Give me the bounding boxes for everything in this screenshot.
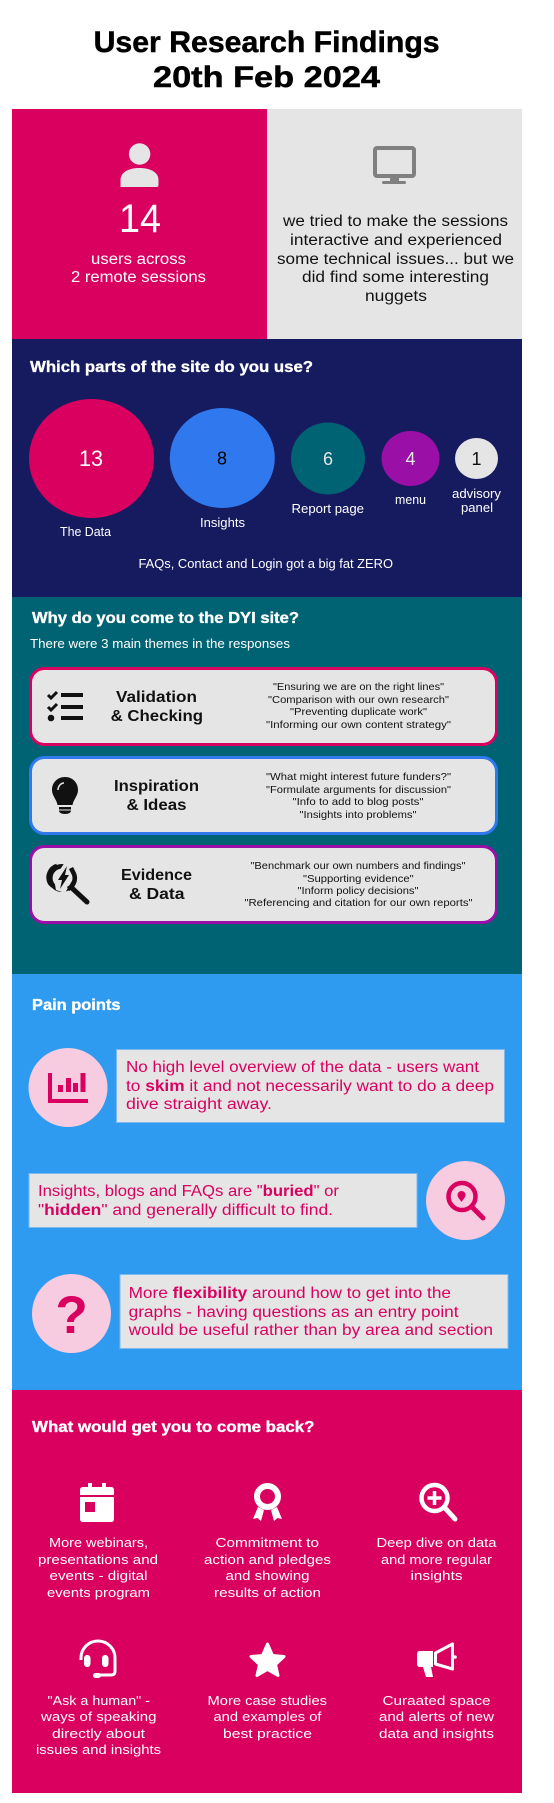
- item text: More case studies: [208, 1693, 328, 1708]
- attendance caption: [71, 251, 206, 286]
- heading: pain points: Pain points: [32, 997, 121, 1014]
- callout text: graphs - having questions as an entry point: [129, 1304, 459, 1321]
- title: [94, 26, 440, 94]
- card: inspiration and ideas: [30, 758, 496, 834]
- callout text: [116, 1050, 504, 1122]
- icon: star: [251, 1644, 284, 1676]
- card quotes: "What might interest future funders?": [266, 771, 451, 783]
- card quotes: "Formulate arguments for discussion": [266, 784, 451, 796]
- icon: headset: [81, 1641, 115, 1678]
- icon: checklist: [48, 692, 83, 721]
- heading: site usage: Which parts of the site do you use?: [30, 359, 313, 376]
- icon: light bulb: [52, 777, 78, 814]
- item: webinars: [38, 1483, 158, 1600]
- bubble: menu 4: 4: [406, 449, 416, 469]
- card quotes: "Preventing duplicate work": [290, 706, 427, 718]
- card title: [121, 867, 192, 903]
- item text: events program: [47, 1585, 150, 1600]
- icon: magnifier with bolt: [49, 862, 87, 902]
- bubble: Report page 6: [291, 422, 365, 516]
- icon: user: [120, 143, 158, 187]
- item text: and showing: [226, 1568, 310, 1583]
- card quotes: "Supporting evidence": [303, 873, 414, 885]
- icon: question mark: ?: [55, 1286, 88, 1345]
- item text: action and pledges: [204, 1552, 332, 1567]
- item text: [376, 1535, 497, 1583]
- pain point: flexibility: [32, 1274, 508, 1353]
- item text: insights: [410, 1568, 463, 1583]
- icon: calendar: [80, 1483, 114, 1522]
- bubble: Insights 8: Insights: [200, 516, 245, 530]
- callout text: to skim it and not necessarily want to do a deep: [126, 1078, 494, 1095]
- card title: Evidence: [121, 867, 192, 884]
- bubble: menu 4: menu: [395, 493, 426, 507]
- icon: magnifier plus: [422, 1485, 455, 1519]
- bubble: advisory panel 1: advisory: [452, 487, 502, 501]
- icon: megaphone: [417, 1644, 457, 1677]
- callout text: would be useful rather than by area and section: [127, 1322, 493, 1339]
- title: 20th Feb 2024: [153, 61, 380, 94]
- card quotes: "Insights into problems": [300, 809, 417, 821]
- item: commitment: [204, 1486, 332, 1600]
- title: User Research Findings: [94, 26, 440, 59]
- zero usage note: FAQs, Contact and Login got a big fat ZERO: [138, 557, 393, 571]
- callout text: [120, 1274, 508, 1348]
- item: curated space: [379, 1644, 495, 1741]
- panel: site usage: [12, 339, 522, 597]
- item text: and alerts of new: [379, 1709, 495, 1724]
- card title: [114, 778, 199, 814]
- card quotes: "Comparison with our own research": [268, 694, 449, 706]
- item: deep dive: [376, 1485, 497, 1583]
- session note text: nuggets: [365, 288, 427, 305]
- card quotes: [266, 771, 451, 821]
- bubble: advisory panel 1: [452, 438, 502, 515]
- bubble: Report page 6: Report page: [292, 502, 364, 516]
- card title: Inspiration: [114, 778, 199, 795]
- item text: "Ask a human" -: [48, 1693, 150, 1708]
- panel: what brings users back: [12, 1390, 522, 1793]
- bubble: The Data 13: 13: [79, 446, 103, 471]
- callout text: Insights, blogs and FAQs are " buried" or: [38, 1183, 339, 1200]
- bubble: menu 4: [382, 431, 440, 507]
- item text: events - digital: [50, 1568, 148, 1583]
- bubble: Insights 8: [170, 408, 275, 530]
- item text: Curaated space: [382, 1693, 490, 1708]
- item text: issues and insights: [36, 1742, 162, 1757]
- card title: & Data: [129, 886, 185, 903]
- item text: directly about: [52, 1726, 145, 1741]
- item text: [208, 1693, 328, 1741]
- panel: attendance: [12, 109, 267, 339]
- bubble: The Data 13: The Data: [60, 525, 111, 539]
- card quotes: "Informing our own content strategy": [266, 719, 451, 731]
- attendance caption: users across: [91, 251, 186, 268]
- item text: Deep dive on data: [376, 1535, 497, 1550]
- card title: Validation: [116, 689, 197, 706]
- icon: rosette: [253, 1486, 282, 1521]
- card quotes: "Info to add to blog posts": [292, 796, 424, 808]
- item text: and examples of: [214, 1709, 322, 1724]
- callout text: More flexibility around how to get into the: [129, 1285, 451, 1302]
- icon: magnifier with pin: [426, 1161, 505, 1240]
- item text: presentations and: [38, 1552, 158, 1567]
- bubble: advisory panel 1: panel: [461, 501, 493, 515]
- card: validation and checking: [30, 668, 496, 744]
- bubble: The Data 13: [29, 399, 154, 539]
- callout text: "hidden " and generally difficult to find.: [38, 1202, 333, 1219]
- icon: monitor: [375, 148, 414, 184]
- card title: [111, 689, 203, 725]
- item text: [38, 1535, 158, 1600]
- card quotes: "Referencing and citation for our own reports": [244, 897, 473, 909]
- card quotes: "Inform policy decisions": [298, 885, 419, 897]
- session note text: interactive and experienced: [290, 232, 502, 249]
- attendance caption: 2 remote sessions: [71, 269, 206, 286]
- icon: bar chart: [28, 1048, 108, 1127]
- item text: More webinars,: [49, 1535, 148, 1550]
- item text: [36, 1693, 162, 1757]
- panel: session note: [267, 109, 522, 339]
- card quotes: [266, 681, 451, 731]
- session note text: [277, 213, 514, 305]
- callout text: No high level overview of the data - users want: [126, 1059, 480, 1076]
- card quotes: [244, 860, 473, 909]
- item: ask a human: [36, 1641, 162, 1757]
- session note text: we tried to make the sessions: [282, 213, 508, 230]
- bubble: Insights 8: 8: [217, 448, 227, 468]
- item text: [379, 1693, 495, 1741]
- item text: data and insights: [379, 1726, 495, 1741]
- panel: pain points: [12, 974, 522, 1390]
- session note text: some technical issues... but we: [277, 251, 514, 268]
- panel: reasons for visiting: [12, 597, 522, 974]
- pain point: no overview: [28, 1048, 504, 1127]
- card title: & Ideas: [126, 797, 186, 814]
- item text: Commitment to: [216, 1535, 319, 1550]
- item text: and more regular: [381, 1552, 493, 1567]
- item text: results of action: [214, 1585, 321, 1600]
- icon: question mark: [32, 1274, 111, 1353]
- card: evidence and data: [30, 846, 496, 922]
- pain point: buried content: [29, 1161, 505, 1240]
- item: case studies: [208, 1644, 328, 1741]
- callout text: [29, 1174, 417, 1228]
- session note text: did find some interesting: [302, 269, 489, 286]
- heading: come back: What would get you to come back?: [32, 1419, 314, 1436]
- card quotes: "Ensuring we are on the right lines": [273, 681, 444, 693]
- bubble: Report page 6: 6: [323, 449, 333, 469]
- heading: reasons: Why do you come to the DYI site?: [32, 610, 299, 627]
- card title: & Checking: [111, 708, 203, 725]
- bubble: advisory panel 1: 1: [472, 449, 482, 469]
- item text: ways of speaking: [40, 1709, 157, 1724]
- reasons intro: There were 3 main themes in the responses: [30, 636, 290, 651]
- callout text: dive straight away.: [126, 1096, 272, 1113]
- item text: [204, 1535, 332, 1600]
- card quotes: "Benchmark our own numbers and findings": [250, 860, 466, 872]
- item text: best practice: [223, 1726, 312, 1741]
- number: 14 users: 14: [119, 197, 161, 241]
